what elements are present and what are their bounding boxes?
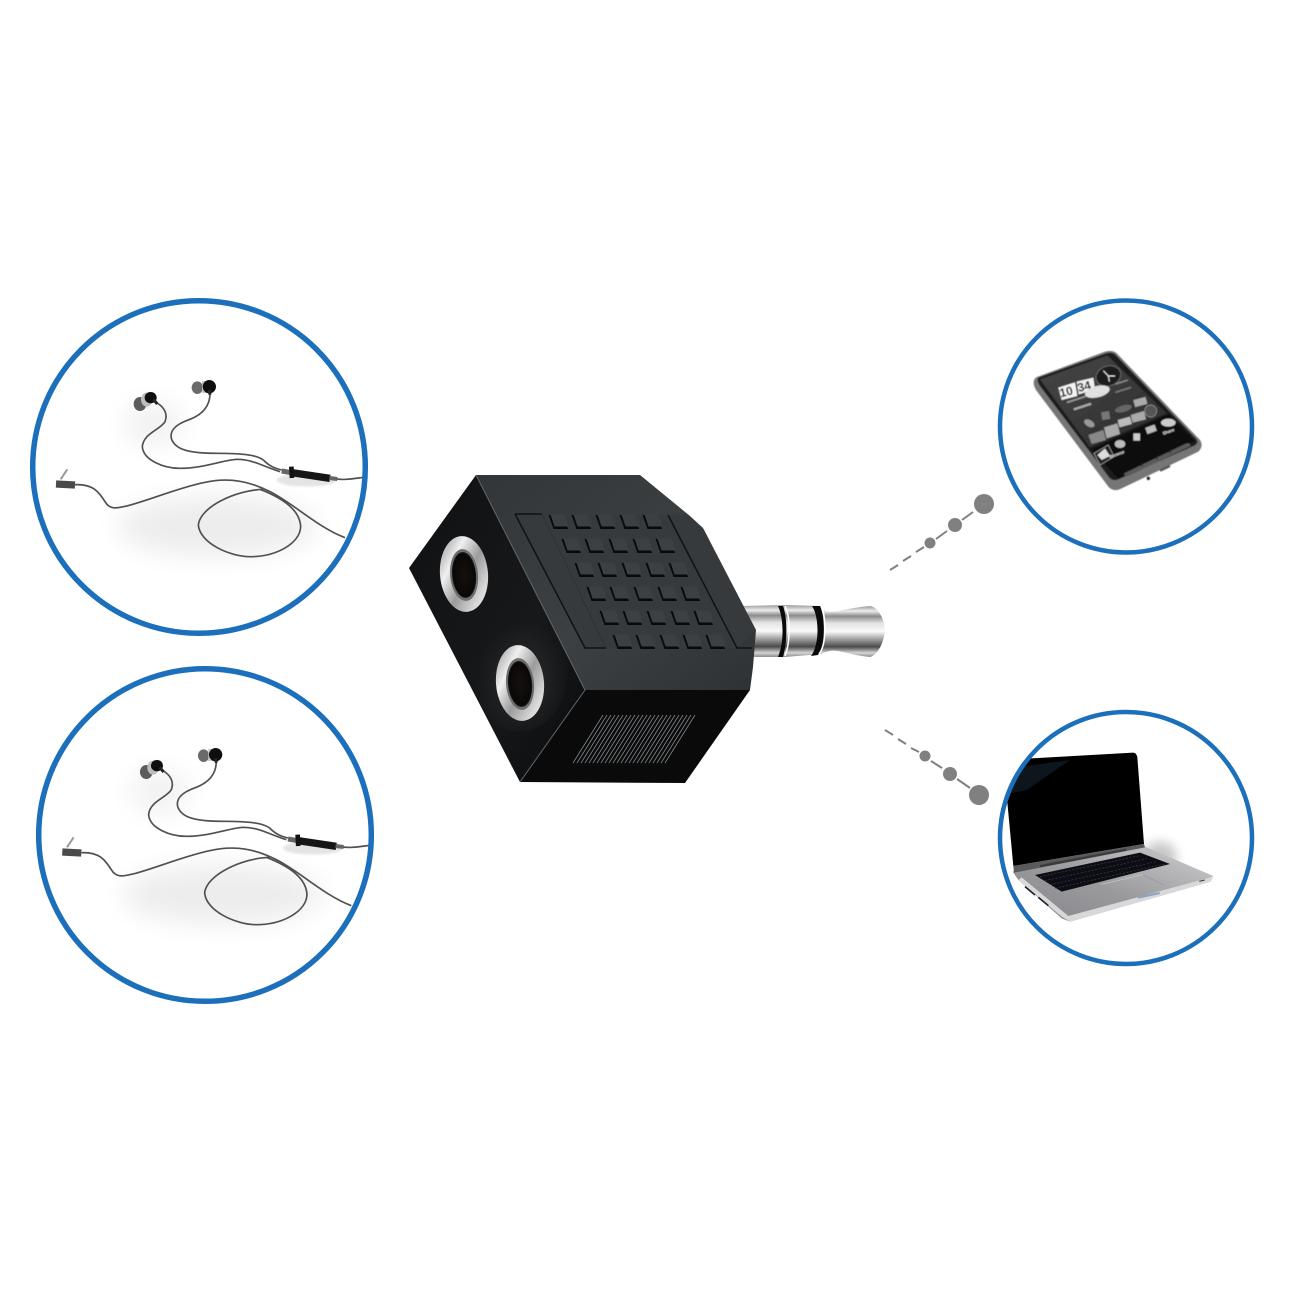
adapter top face bbox=[476, 475, 756, 690]
panel: earphones bottom bbox=[39, 669, 371, 1001]
photo: smartphone: Share bbox=[1162, 427, 1176, 436]
adapter edge highlights bbox=[476, 475, 585, 782]
panel: smartphone bbox=[1000, 300, 1252, 552]
connector: to phone bbox=[890, 494, 994, 570]
panel: earphones top bbox=[33, 301, 365, 633]
adapter bottom face bbox=[520, 690, 750, 783]
photo: smartphone: 34 bbox=[1076, 378, 1093, 395]
plug white contact lines bbox=[785, 606, 825, 656]
hatching on bottom face bbox=[573, 715, 695, 763]
ring: earphones top bbox=[33, 301, 365, 633]
socket surface glow bbox=[472, 608, 568, 732]
lower audio socket bbox=[493, 643, 547, 723]
photo: smartphone bbox=[1034, 351, 1202, 490]
photo: laptop bbox=[1003, 753, 1213, 922]
upper audio socket bbox=[437, 534, 491, 614]
plug sleeve bbox=[740, 605, 785, 657]
plug middle ring bbox=[785, 605, 822, 657]
photo: earphones bottom bbox=[62, 748, 370, 925]
plug bbox=[740, 605, 885, 657]
adapter raised panel bbox=[515, 514, 755, 649]
raised dot grid bbox=[548, 514, 726, 649]
infographic canvas bbox=[30, 298, 1254, 1004]
panel: laptop bbox=[1000, 712, 1252, 964]
connector: to laptop bbox=[885, 730, 989, 805]
adapter left face bbox=[409, 475, 585, 782]
plug insulating bands bbox=[778, 606, 824, 657]
photo: earphones top bbox=[56, 380, 363, 557]
photo: smartphone: 10 bbox=[1058, 383, 1075, 400]
central adapter bbox=[409, 475, 885, 783]
ring: smartphone bbox=[1000, 300, 1252, 552]
photo: smartphone: Browse bbox=[1109, 449, 1126, 459]
ring: earphones bottom bbox=[39, 669, 371, 1001]
ring: laptop bbox=[1000, 712, 1252, 964]
plug tip bbox=[820, 606, 885, 657]
